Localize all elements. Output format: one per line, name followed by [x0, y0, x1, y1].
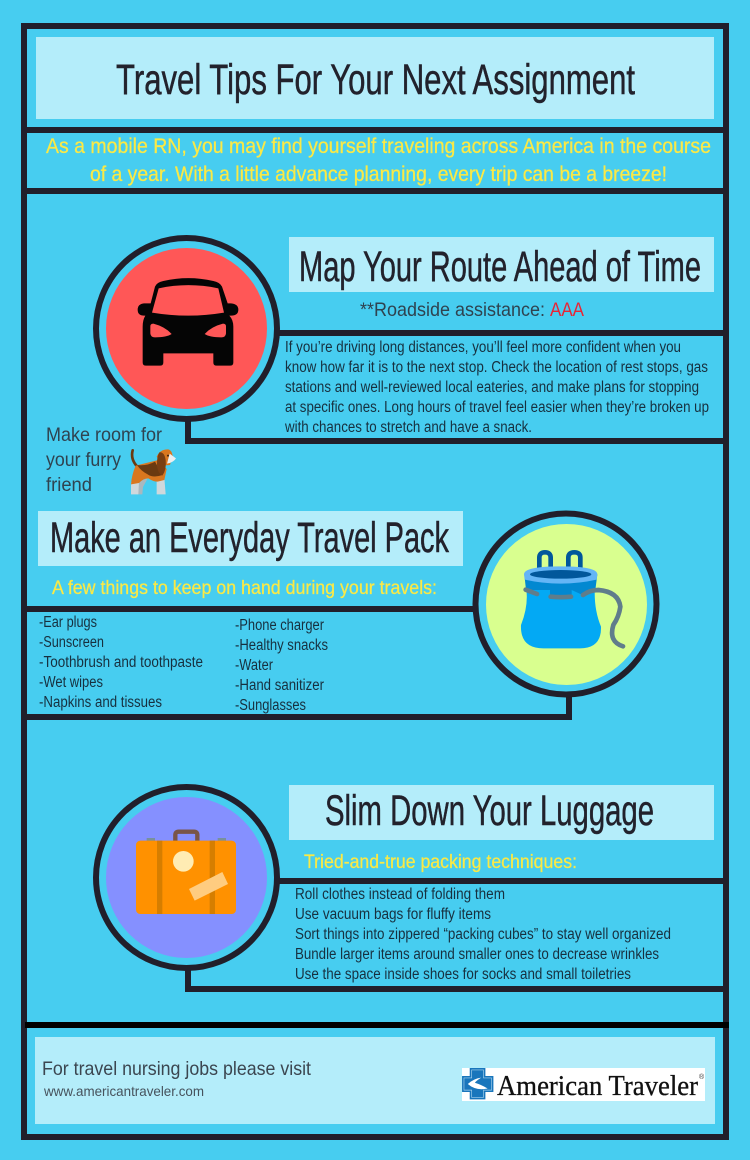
- furry friend note: friend: [46, 474, 92, 496]
- heading: everyday travel pack: Make an Everyday Travel Pack: [50, 514, 449, 562]
- footer text: www.americantraveler.com: [43, 1083, 204, 1099]
- furry friend note: your furry: [46, 449, 121, 471]
- icon: car in red circle: [96, 238, 277, 419]
- furry friend note: [46, 424, 162, 496]
- icon: dog: [131, 449, 176, 494]
- pack list: column two: -Phone charger: [235, 617, 324, 634]
- panel: map your route: [96, 237, 723, 444]
- panel: footer: [25, 1022, 729, 1124]
- panel: introduction: [21, 127, 729, 194]
- pack list: column two: -Water: [235, 657, 273, 674]
- logo: American Traveler: American Traveler: [497, 1071, 699, 1102]
- pack subheading: A few things to keep on hand during your travels:: [52, 577, 437, 599]
- luggage tips list: [295, 886, 671, 983]
- logo: American Traveler: ®: [699, 1073, 705, 1081]
- footer text: [42, 1058, 312, 1099]
- pack list: column two: -Healthy snacks: [235, 637, 328, 654]
- luggage tips list: Roll clothes instead of folding them: [295, 886, 505, 903]
- footer text: For travel nursing jobs please visit: [42, 1058, 312, 1080]
- introduction text: of a year. With a little advance planning, every trip can be a breeze!: [90, 162, 667, 186]
- icon: suitcase in purple circle: [96, 787, 277, 968]
- roadside assistance note: **Roadside assistance:: [360, 299, 545, 321]
- panel: slim down luggage: [96, 785, 723, 992]
- route body text: [284, 339, 709, 436]
- roadside assistance note: AAA: [550, 299, 584, 321]
- pack list: column one: [39, 614, 203, 711]
- panel: everyday travel pack: [27, 511, 656, 720]
- furry friend note: Make room for: [46, 424, 162, 446]
- icon: bag in green circle: [476, 514, 656, 694]
- pack list: column one: -Wet wipes: [39, 674, 103, 691]
- luggage subheading: Tried-and-true packing techniques:: [304, 851, 577, 873]
- luggage tips list: Use vacuum bags for fluffy items: [295, 906, 491, 923]
- pack list: column two: [235, 617, 328, 714]
- heading: everyday travel pack: [38, 511, 463, 566]
- luggage tips list: Sort things into zippered “packing cubes” to stay well organized: [295, 926, 671, 943]
- pack list: column one: -Napkins and tissues: [39, 694, 162, 711]
- luggage tips list: Bundle larger items around smaller ones to decrease wrinkles: [295, 946, 659, 963]
- pack list: column two: -Hand sanitizer: [235, 677, 324, 694]
- route body text: If you’re driving long distances, you’ll feel more confident when you: [285, 339, 681, 356]
- pack list: column one: -Sunscreen: [39, 634, 104, 651]
- panel: title: [36, 37, 714, 119]
- luggage tips list: Use the space inside shoes for socks and small toiletries: [295, 966, 631, 983]
- pack list: column two: -Sunglasses: [235, 697, 306, 714]
- pack list: column one: -Toothbrush and toothpaste: [39, 654, 203, 671]
- route body text: with chances to stretch and have a snack.: [284, 419, 532, 436]
- pack list: column one: -Ear plugs: [39, 614, 97, 631]
- introduction text: [46, 134, 711, 186]
